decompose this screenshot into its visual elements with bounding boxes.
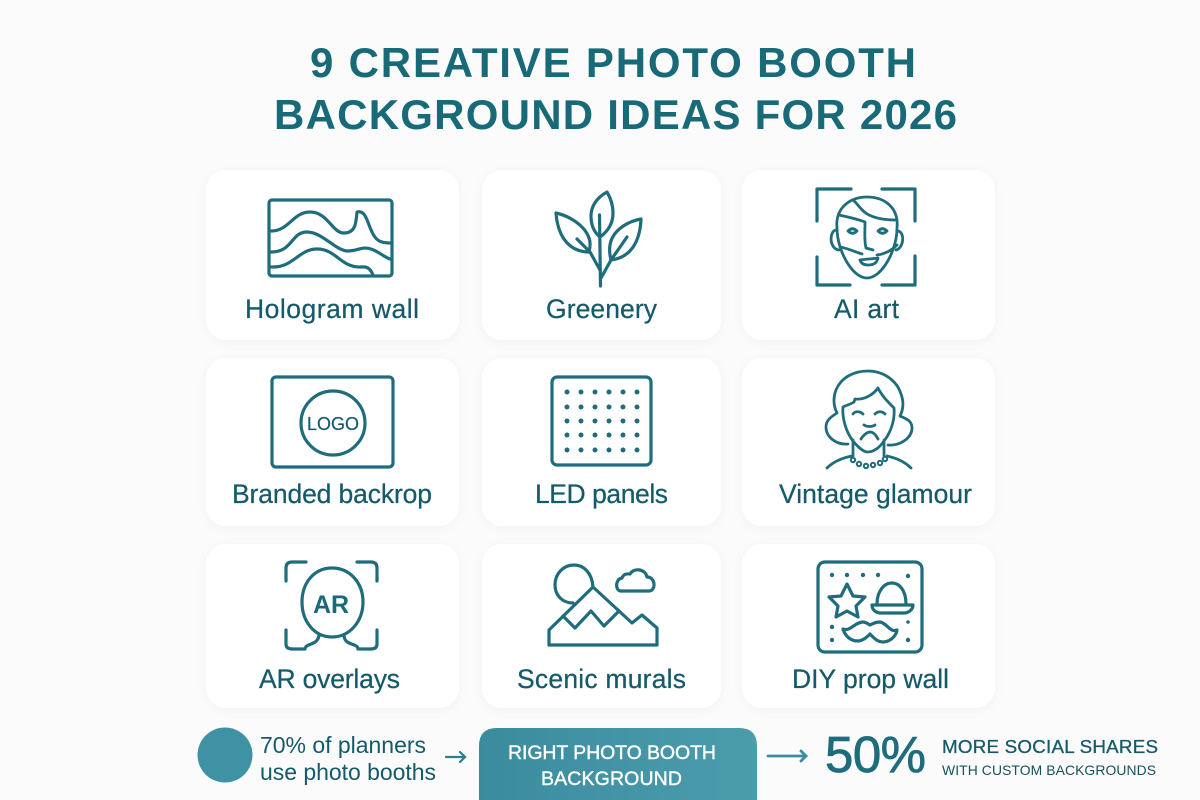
- icon: LED dot grid: [552, 377, 651, 465]
- panel: hologram wall: [206, 170, 459, 340]
- panel: AR overlays: [206, 544, 459, 708]
- label: Greenery: Greenery: [546, 294, 658, 324]
- icon: AR face scan: AR: [313, 591, 349, 619]
- label: DIY prop wall: DIY prop wall: [792, 664, 949, 694]
- callout: right photo booth background: RIGHT PHOTO BOOTH: [508, 742, 716, 764]
- callout: right photo booth background: [479, 728, 757, 800]
- panel: AI art: [742, 170, 995, 340]
- panel: DIY prop wall: [742, 544, 995, 708]
- title: 9 CREATIVE PHOTO BOOTH: [310, 39, 916, 86]
- icon: logo frame: [272, 377, 393, 467]
- title: BACKGROUND IDEAS FOR 2026: [274, 91, 957, 138]
- panel: greenery: [482, 170, 721, 340]
- icon: AI face: [817, 189, 915, 285]
- icon: hologram wall: [269, 200, 392, 276]
- label: LED panels: LED panels: [535, 479, 668, 509]
- label: Vintage glamour: Vintage glamour: [779, 479, 972, 509]
- label: AR overlays: AR overlays: [259, 664, 400, 694]
- stat: 50% more social shares: [825, 726, 1158, 783]
- label: AI art: AI art: [834, 294, 900, 324]
- icon: mountain, sun and cloud: [549, 565, 657, 645]
- stat: 50% more social shares: MORE SOCIAL SHARES: [942, 736, 1158, 757]
- icon: prop wall: [818, 562, 922, 652]
- panel: scenic murals: [482, 544, 721, 708]
- panel: LED panels: [482, 358, 721, 526]
- label: Branded backrop: Branded backrop: [232, 479, 432, 509]
- label: Scenic murals: Scenic murals: [517, 664, 686, 694]
- icon: AR face scan: [286, 562, 377, 649]
- icon: greenery: [556, 192, 641, 286]
- arrow: [768, 751, 806, 761]
- label: Hologram wall: Hologram wall: [245, 294, 419, 324]
- stat: 50% more social shares: WITH CUSTOM BACKGROUNDS: [942, 762, 1156, 778]
- stat: 70% of planners: use photo booths: [260, 759, 436, 785]
- stat: 70% of planners: 70% of planners: [260, 732, 426, 758]
- icon: logo frame: LOGO: [307, 414, 359, 434]
- arrow: [446, 752, 465, 762]
- stat: 50% more social shares: 50%: [825, 726, 926, 783]
- title: [274, 39, 957, 138]
- icon: vintage woman: [826, 371, 912, 468]
- panel: vintage glamour: [742, 358, 995, 526]
- panel: branded backdrop: [206, 358, 459, 526]
- stat: 70% of planners: [198, 728, 436, 785]
- callout: right photo booth background: BACKGROUND: [541, 768, 682, 790]
